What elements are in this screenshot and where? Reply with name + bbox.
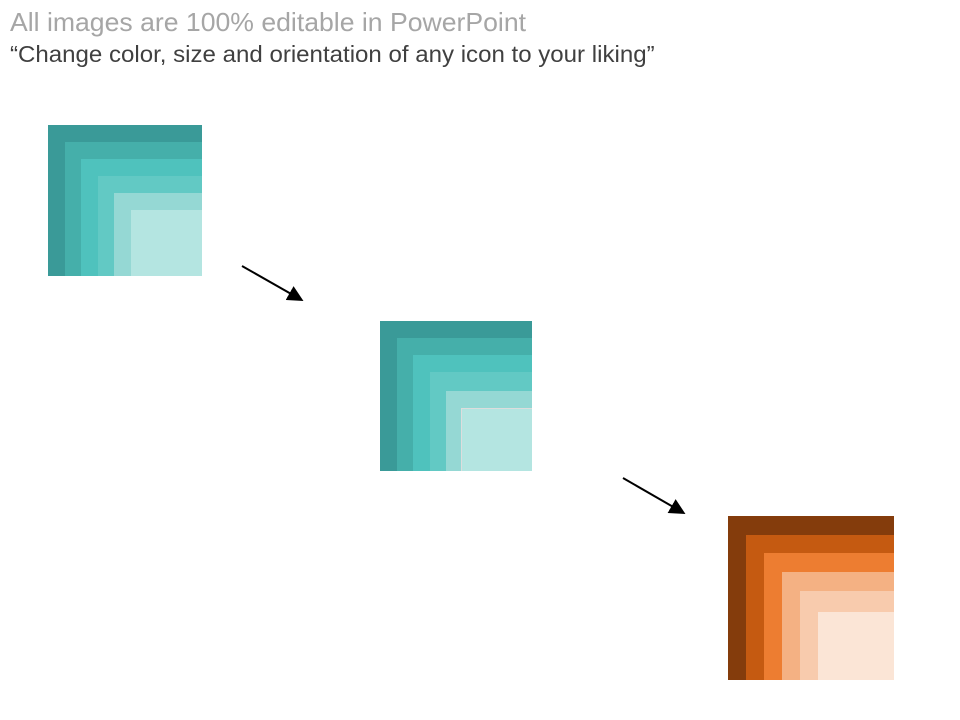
title: All images are 100% editable in PowerPoint [10, 7, 526, 37]
subtitle: “Change color, size and orientation of any icon to your liking” [10, 41, 655, 67]
orange square [728, 516, 894, 680]
teal square 2 (selected) [380, 321, 532, 471]
teal square 1 [48, 125, 202, 276]
